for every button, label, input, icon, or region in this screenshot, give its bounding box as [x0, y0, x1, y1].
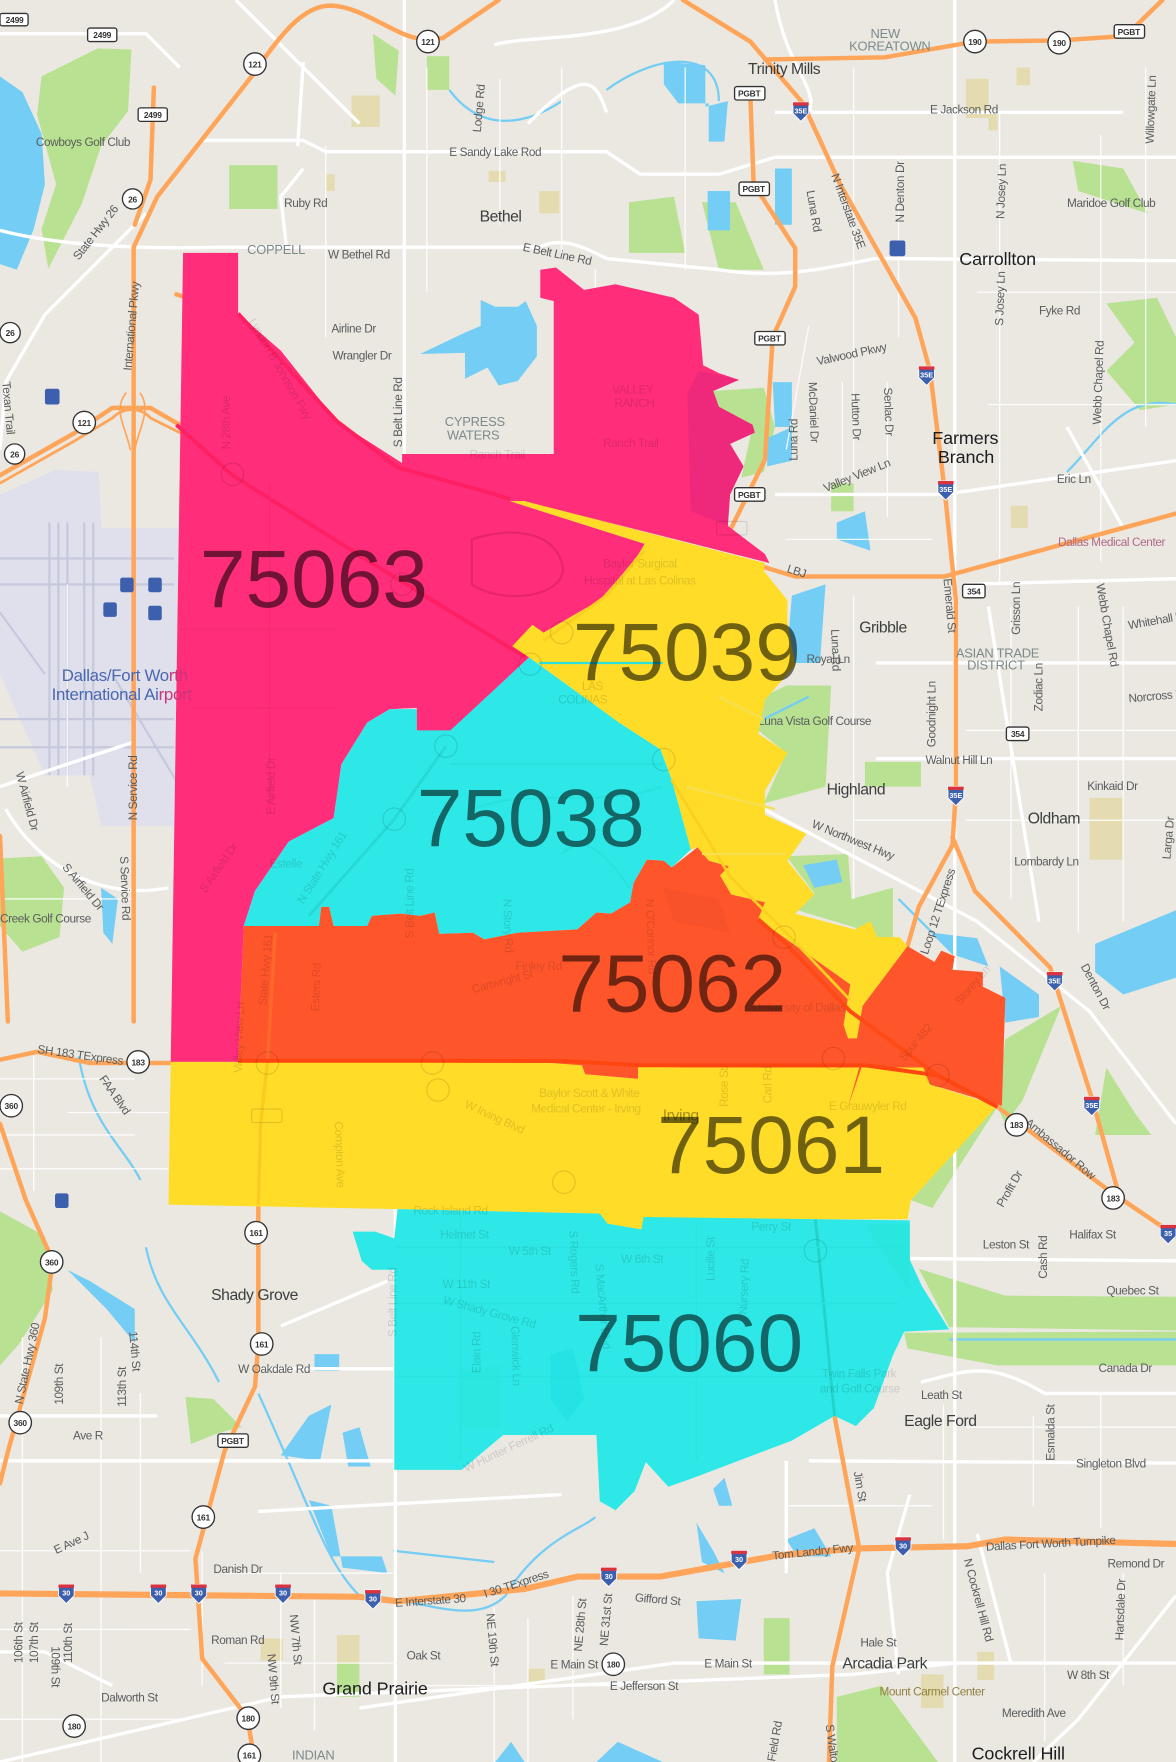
faint labels inside zones: [197, 316, 993, 1475]
zone number labels: [200, 534, 885, 1389]
street labels: E Main St: [704, 1658, 753, 1671]
street labels: NE 28th St: [572, 1597, 590, 1652]
faint labels inside zones: University of Dallas: [753, 1001, 846, 1014]
street labels: 106th St: [12, 1621, 25, 1663]
faint labels inside zones: and Golf Course: [820, 1382, 901, 1395]
airport label: Dallas/Fort Worth: [62, 666, 188, 685]
place labels: Arcadia Park: [842, 1656, 928, 1673]
street labels: Valley View Ln: [822, 456, 892, 495]
street labels: S Airfield Dr: [59, 861, 106, 914]
faint labels inside zones: Lyndon B Johnson Fwy: [246, 316, 314, 422]
faint labels inside zones: Storey Ln: [953, 963, 993, 1008]
place labels: NEW: [870, 26, 901, 41]
street labels: Meredith Ave: [1002, 1707, 1067, 1720]
street labels: I 30 TExpress: [482, 1567, 551, 1601]
route shields: 161: [249, 1228, 263, 1238]
route shields: 2499: [6, 15, 24, 25]
street labels: Cowboys Golf Club: [36, 136, 131, 149]
zone number labels: 75062: [558, 938, 786, 1029]
street labels: Field Rd: [765, 1720, 785, 1762]
street labels: Ambassador Row: [1022, 1116, 1098, 1183]
place labels: DISTRICT: [967, 658, 1025, 673]
route shields: PGBT: [758, 334, 782, 344]
street labels: Lombardy Ln: [1014, 855, 1079, 868]
interstate shields: 30: [154, 1589, 162, 1598]
street labels: Webb Chapel Rd: [1091, 340, 1107, 425]
faint labels inside zones: Cartwright St: [470, 967, 536, 996]
place labels: Shady Grove: [211, 1287, 299, 1304]
street labels: 109th St: [49, 1646, 62, 1688]
street labels: McDaniel Dr: [806, 382, 821, 443]
street labels: Ave R: [73, 1429, 103, 1442]
faint labels inside zones: S Belt Line Rd: [403, 868, 416, 938]
faint labels inside zones: Baylor Scott & White: [539, 1087, 640, 1100]
street labels: Roman Rd: [211, 1634, 264, 1647]
street labels: Oak St: [407, 1650, 441, 1663]
faint labels inside zones: W 5th St: [509, 1245, 552, 1258]
street labels: Kinkaid Dr: [1087, 780, 1138, 793]
interstate shields: 35E: [794, 106, 807, 115]
route shields: 161: [255, 1339, 269, 1349]
route shields: 360: [5, 1101, 18, 1111]
airport grounds: [0, 470, 180, 826]
street labels: W Northwest Hwy: [810, 818, 896, 863]
street labels: Goodnight Ln: [926, 681, 939, 747]
route shields: 2499: [144, 110, 162, 120]
street labels: N Denton Dr: [894, 161, 907, 222]
faint labels inside zones: S MacArthur Blvd: [592, 1263, 613, 1350]
faint labels inside zones: Ranch Trail: [603, 437, 658, 450]
faint labels inside zones: Finley Rd: [516, 960, 562, 973]
faint labels inside zones: N 28th Ave: [220, 395, 233, 449]
route shields: 180: [607, 1660, 620, 1670]
zone number labels: 75038: [417, 773, 645, 864]
street labels: Eric Ln: [1057, 473, 1091, 486]
place labels: Farmers: [932, 428, 998, 448]
faint labels inside zones: N O'Connor Rd: [643, 899, 658, 974]
street labels: Willowgate Ln: [1144, 75, 1159, 144]
street labels: N Service Rd: [127, 756, 140, 820]
street labels: Profit Dr: [994, 1168, 1026, 1210]
street labels: Leath St: [921, 1389, 963, 1402]
zone 75063: [171, 253, 769, 1062]
faint labels inside zones: W Hunter Ferrell Rd: [462, 1422, 556, 1475]
route shields: 2499: [93, 30, 112, 40]
transit icons: [45, 240, 905, 1208]
route shields: 26: [128, 194, 138, 204]
street labels: N Josey Ln: [994, 164, 1009, 219]
street labels: Halifax St: [1069, 1228, 1117, 1241]
street labels: FAA Blvd: [96, 1073, 133, 1117]
faint labels inside zones: Baylor Surgical: [603, 557, 676, 570]
place labels: Carrollton: [959, 249, 1036, 269]
street labels: NW 9th St: [264, 1653, 282, 1705]
place labels: COPPELL: [247, 242, 305, 257]
route shields: PGBT: [738, 490, 761, 500]
faint labels inside zones: Nursery Rd: [737, 1259, 752, 1315]
place labels: Grand Prairie: [322, 1679, 428, 1699]
street labels: Luna Rd: [804, 189, 824, 233]
street labels: NE 31st St: [598, 1592, 615, 1647]
street labels: Grisson Ln: [1010, 582, 1023, 635]
route shields: 26: [10, 449, 20, 459]
street labels: SH 183 TExpress: [37, 1043, 124, 1068]
faint labels inside zones: Rose St: [718, 1067, 731, 1107]
place labels: ASIAN TRADE: [956, 645, 1040, 660]
street labels: S Josey Ln: [993, 271, 1008, 326]
street labels: W 8th St: [1067, 1669, 1110, 1682]
faint labels inside zones: Perry St: [751, 1220, 792, 1233]
interstate shields: 30: [279, 1589, 287, 1598]
street labels: Airline Dr: [331, 323, 376, 336]
faint labels inside zones: Twin Falls Park: [822, 1368, 897, 1381]
street labels: Hartsdale Dr: [1113, 1578, 1128, 1641]
street labels: Walnut Hill Ln: [926, 754, 992, 767]
route shields: 26: [6, 328, 15, 338]
route shields: 161: [197, 1512, 211, 1522]
street labels: S Service Rd: [117, 856, 132, 920]
street labels: LBJ: [785, 562, 808, 581]
street labels: Hale St: [860, 1636, 897, 1649]
faint labels inside zones: Esters Rd: [309, 963, 324, 1011]
faint labels inside zones: E Grauwyler Rd: [829, 1100, 907, 1113]
route shields: PGBT: [221, 1436, 245, 1446]
faint labels inside zones: RANCH: [614, 397, 654, 410]
street labels: Tom Landry Fwy: [772, 1541, 854, 1563]
interstate shields: 30: [369, 1594, 377, 1603]
street labels: Fyke Rd: [1039, 305, 1080, 318]
zone 75060: [353, 1209, 949, 1510]
faint labels inside zones: Estelle: [270, 858, 303, 871]
street labels: W Oakdale Rd: [238, 1363, 310, 1376]
street labels: E Main St: [550, 1659, 599, 1672]
route shields: 360: [45, 1257, 59, 1267]
street labels: E Interstate 30: [395, 1592, 467, 1610]
place labels: CYPRESS: [445, 414, 506, 429]
faint labels inside zones: Lucille St: [704, 1236, 717, 1281]
street labels: E Jackson Rd: [930, 103, 998, 116]
place labels: Highland: [827, 781, 885, 798]
faint labels inside zones: S Airfield Dr: [197, 840, 241, 895]
street labels: Gifford St: [634, 1591, 682, 1608]
street labels: Hutton Dr: [848, 393, 863, 441]
zone number labels: 75063: [200, 534, 428, 625]
faint labels inside zones: VALLEY: [612, 383, 654, 396]
street labels: E Belt Line Rd: [522, 241, 593, 268]
street labels: S Belt Line Rd: [392, 377, 405, 447]
zone number labels: 75060: [575, 1298, 803, 1389]
faint labels inside zones: Carl Rd: [762, 1066, 775, 1103]
faint labels inside zones: Helmet St: [440, 1228, 490, 1241]
interstate shields: 35E: [949, 791, 962, 800]
place labels: Bethel: [480, 208, 521, 225]
street labels: Zodiac Ln: [1032, 663, 1045, 711]
place labels: Branch: [938, 447, 994, 467]
place labels: [211, 26, 1165, 1762]
street labels: Singleton Blvd: [1076, 1458, 1146, 1471]
street labels: 113th St: [116, 1366, 129, 1407]
route shields: 121: [421, 37, 435, 47]
place labels: Eagle Ford: [904, 1413, 977, 1430]
route shields: PGBT: [1118, 27, 1141, 37]
street labels: E Jefferson St: [610, 1680, 679, 1693]
route shields: 360: [14, 1418, 27, 1428]
faint labels inside zones: N State Hwy 161: [295, 829, 350, 906]
route shields: 354: [967, 586, 981, 596]
faint map detail inside zones: [176, 314, 997, 1461]
faint labels inside zones: N Story Rd: [500, 899, 515, 953]
faint labels inside zones: W 6th St: [621, 1253, 664, 1266]
interstate shields: 30: [605, 1572, 613, 1581]
route shields: 121: [78, 418, 91, 428]
place labels: WATERS: [447, 427, 500, 442]
street labels: Lodge Rd: [471, 84, 488, 133]
street labels: Dalworth St: [101, 1691, 159, 1704]
street labels: Webb Chapel Rd: [1093, 583, 1121, 668]
street labels: Valwood Pkwy: [816, 341, 888, 368]
route shields: 354: [1011, 729, 1025, 739]
street labels: E Ave J: [52, 1529, 91, 1557]
faint labels inside zones: Rock Island Rd: [413, 1205, 488, 1218]
street labels: 114th St: [126, 1331, 143, 1373]
street labels: International Pkwy: [121, 281, 142, 371]
interstate shields: 35: [1164, 1229, 1172, 1238]
route shields: 180: [242, 1714, 255, 1724]
interstate shields: 30: [62, 1589, 70, 1598]
street labels: Creek Golf Course: [0, 913, 92, 926]
faint labels inside zones: Hospital at Las Colinas: [584, 574, 696, 587]
faint route markers inside zones: [221, 463, 949, 1262]
faint labels inside zones: W Shady Grove Rd: [442, 1294, 537, 1331]
interstate shields: 35E: [920, 371, 933, 380]
faint labels inside zones: Valley View Ln: [231, 1002, 247, 1073]
street labels: Jim St: [851, 1470, 869, 1504]
faint labels inside zones: State Hwy 161: [256, 934, 275, 1006]
street labels: NE 19th St: [483, 1613, 501, 1668]
street labels: Royal Ln: [806, 653, 850, 666]
street labels: State Hwy 26: [71, 202, 122, 263]
route shields: PGBT: [742, 184, 766, 194]
zone 75061: [168, 1062, 997, 1229]
street labels: Canada Dr: [1098, 1362, 1152, 1375]
zone number labels: 75039: [573, 607, 801, 698]
interstate shields: 30: [899, 1541, 907, 1550]
street labels: 110th St: [62, 1622, 75, 1663]
faint labels inside zones: Ranch Trail: [470, 448, 525, 461]
street labels: N Cockrell Hill Rd: [961, 1557, 995, 1643]
street labels: Denton Dr: [1078, 962, 1113, 1013]
street labels: Quebec St: [1106, 1285, 1160, 1298]
place labels: Gribble: [859, 620, 907, 637]
route shields: 161: [243, 1751, 257, 1761]
faint labels inside zones: Elain Rd: [471, 1332, 484, 1373]
street labels: Dallas Fort Worth Turnpike: [986, 1534, 1117, 1554]
faint labels inside zones: W 11th St: [443, 1278, 491, 1291]
airport label: [52, 666, 192, 704]
street labels: Ruby Rd: [284, 197, 327, 210]
zone number labels: 75061: [657, 1100, 885, 1191]
street labels: Wrangler Dr: [332, 350, 392, 363]
zone 75039: [510, 501, 908, 1038]
interstate shields: 30: [735, 1555, 743, 1564]
faint labels inside zones: Medical Center - Irving: [531, 1102, 641, 1115]
interstate shields: 30: [195, 1589, 203, 1598]
place labels: Trinity Mills: [748, 61, 821, 78]
route shields: 190: [1053, 38, 1066, 48]
faint labels inside zones: Compton Ave: [332, 1121, 347, 1189]
street labels: Emerald St: [941, 578, 958, 634]
route shields: 190: [968, 37, 982, 47]
route shields: 183: [131, 1057, 145, 1067]
faint labels inside zones: LAS: [582, 680, 603, 693]
street labels: E Sandy Lake Rod: [449, 146, 541, 159]
place labels: Oldham: [1028, 811, 1080, 828]
interstate shields: 35E: [939, 485, 952, 494]
zone 75062: [238, 847, 1005, 1107]
street labels: W Bethel Rd: [328, 248, 390, 261]
street labels: NW 7th St: [287, 1614, 304, 1666]
faint labels inside zones: Spur 482: [897, 1021, 935, 1064]
street labels: Cash Rd: [1037, 1236, 1050, 1279]
street labels: N Interstate 35E: [828, 172, 868, 251]
faint labels inside zones: S Rogers Rd: [566, 1230, 582, 1294]
street labels: Loop 12 TExpress: [918, 867, 958, 956]
street labels: N State Hwy 360: [13, 1321, 43, 1405]
faint labels inside zones: Irving: [663, 1107, 699, 1124]
street labels: Luna Rd: [787, 419, 800, 461]
place labels: Dallas Medical Center: [1058, 536, 1165, 549]
tan land-use blocks: [261, 67, 1123, 1708]
airport label: International Airport: [52, 685, 192, 704]
faint labels inside zones: Glenwick Ln: [508, 1326, 523, 1386]
street labels: 109th St: [53, 1363, 66, 1405]
place labels: Mount Carmel Center: [879, 1686, 985, 1699]
street labels: W Airfield Dr: [13, 771, 41, 833]
street labels: Leston St: [983, 1238, 1030, 1251]
street labels: Luna Rd: [828, 629, 843, 671]
faint labels inside zones: COLINAS: [558, 693, 608, 706]
route shields: 183: [1010, 1120, 1024, 1130]
I-30 highway: [0, 1540, 1176, 1601]
faint labels inside zones: E Airfield Dr: [265, 757, 278, 815]
route shields: 183: [1106, 1193, 1120, 1203]
route shields: PGBT: [738, 89, 761, 99]
place labels: KOREATOWN: [849, 39, 931, 54]
street labels: Danish Dr: [213, 1563, 263, 1576]
faint labels inside zones: S Belt Line Rd: [386, 1267, 399, 1337]
faint labels inside zones: W Irving Blvd: [463, 1098, 526, 1137]
street labels: 107th St: [28, 1621, 41, 1663]
street labels: Remond Dr: [1107, 1558, 1165, 1571]
street labels: Esmalda St: [1045, 1403, 1058, 1461]
street labels: Senlac Dr: [881, 387, 896, 436]
zone 75038: [244, 657, 691, 939]
interstate shields: 35E: [1048, 976, 1061, 985]
interstate shields: 35E: [1085, 1101, 1098, 1110]
route shields: 180: [67, 1721, 81, 1731]
route shields: 121: [248, 59, 262, 69]
street labels: Maridoe Golf Club: [1067, 197, 1156, 210]
street labels: Luna Vista Golf Course: [758, 715, 872, 728]
